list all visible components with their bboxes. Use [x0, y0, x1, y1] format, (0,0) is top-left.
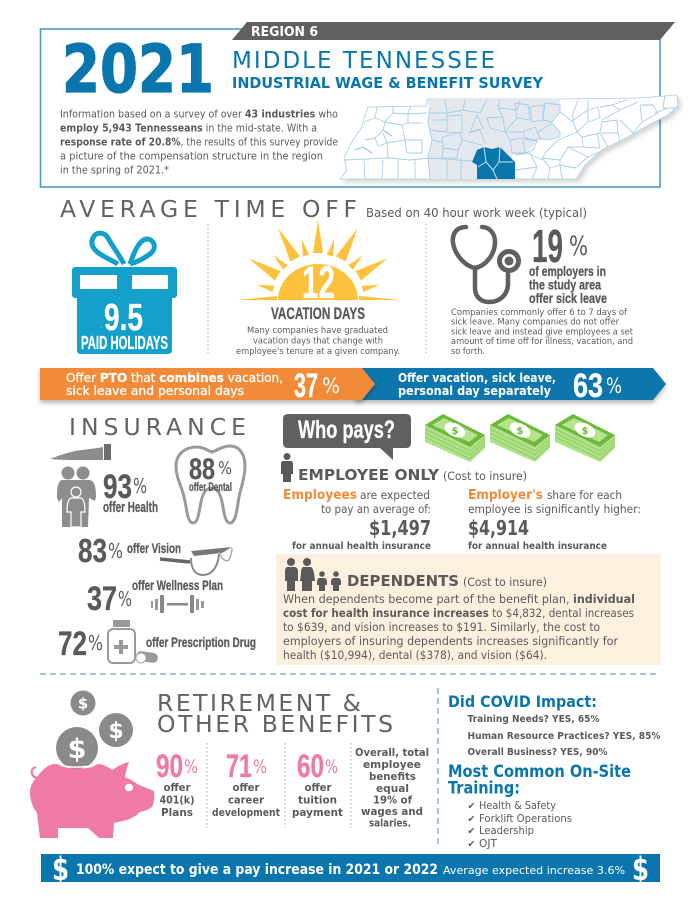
heading: dependents: DEPENDENTS: [347, 572, 459, 590]
panel: on-site training: [448, 762, 631, 850]
stat: 83 percent vision: offer Vision: [127, 540, 181, 556]
text: sick leave description: Companies commonly offer 6 to 7 days of: [451, 308, 628, 318]
text: sick leave description: amount of time off for illness, vacation, and: [451, 337, 633, 347]
list: training topics: ✔: [468, 839, 475, 850]
banner: offer separately (blue arrow): Offer vacation, sick leave,: [398, 370, 556, 385]
stat: 9.5: 9.5: [104, 297, 143, 339]
text: employees cost: $1,497: [369, 516, 431, 540]
heading: retirement and other benefits: OTHER BENEFITS: [157, 710, 393, 738]
list: training topics: ✔: [468, 814, 475, 825]
heading: vacation days: VACATION DAYS: [271, 304, 365, 323]
intro text block: in the spring of 2021.*: [60, 164, 169, 176]
text: vacation description: vacation days that change with: [253, 336, 383, 346]
stat: 37 percent wellness: offer Wellness Plan: [132, 577, 223, 593]
heading: most common on-site training: Training:: [448, 778, 520, 798]
text: employees cost: for annual health insurance: [292, 541, 431, 552]
text: overall benefits share: employee: [363, 759, 421, 771]
banner: offer separately (blue arrow): 63: [573, 367, 603, 405]
list: training topics: OJT: [479, 838, 498, 850]
banner: pay increase: [41, 850, 660, 888]
icon: money stacks: [425, 414, 615, 462]
stat: 72 percent prescription: 72: [58, 625, 87, 663]
icon: piggy bank with coins: [30, 690, 154, 838]
text: dependents description: employers of insuring dependents increases significantly for: [283, 634, 618, 648]
text: pay increase statement: 100% expect to give a pay increase in 2021 or 2022: [76, 862, 438, 878]
stat: 71 percent career development: 71: [226, 748, 252, 784]
text: sick leave description: sick leave. Many companies do not offer: [451, 318, 619, 328]
stat: 37 percent wellness: 37: [87, 580, 117, 618]
icon: dollar sign right: $: [632, 850, 649, 888]
icon and stat: tooth 88 percent dental: offer Dental: [189, 482, 232, 494]
list: training topics: Forklift Operations: [479, 813, 572, 825]
stat: 72 percent prescription: %: [88, 631, 103, 655]
heading: insurance: INSURANCE: [69, 413, 246, 441]
text: overall benefits share: Overall, total: [355, 747, 429, 759]
text: covid results: Overall Business? YES, 90%: [468, 747, 608, 758]
callout: who pays speech bubble: [283, 414, 411, 460]
text: covid results: Human Resource Practices? YES, 85%: [468, 731, 660, 742]
intro text block: [60, 108, 338, 176]
heading: did covid impact: Did COVID Impact:: [448, 692, 597, 711]
banner: offer separately (blue arrow): personal day separately: [398, 383, 551, 398]
icon: money stack 3: $: [582, 426, 588, 437]
text: employer cost: share for each: [547, 488, 622, 502]
text: covid results: Training Needs? YES, 65%: [468, 714, 600, 725]
stat: 90 percent 401k: %: [184, 756, 198, 778]
heading: retirement and other benefits: RETIREMENT &: [157, 689, 361, 717]
heading: employee only: [298, 466, 527, 484]
text: overall benefits share: benefits: [369, 771, 416, 783]
icon: sun with vacation days: [237, 220, 400, 308]
heading: average time off: AVERAGE TIME OFF: [60, 195, 357, 223]
icon: family of four: [285, 558, 341, 591]
stat: 60 percent tuition: payment: [292, 806, 343, 819]
text: overall benefits share: wages and: [361, 806, 423, 818]
icon and stat: tooth 88 percent dental: %: [218, 458, 232, 479]
stat: 71 percent career development: %: [253, 756, 267, 778]
text: employer cost: [468, 487, 641, 552]
stat: 83 percent vision: [78, 532, 181, 569]
list: training topics: ✔: [468, 826, 475, 837]
stat: 60 percent tuition: tuition: [298, 794, 337, 806]
list: training topics: ✔: [468, 801, 475, 812]
text: overall benefits share: salaries.: [369, 818, 411, 830]
icon and stat: tooth 88 percent dental: [176, 446, 245, 523]
heading: most common on-site training: [448, 762, 631, 798]
stat: 83 percent vision: 83: [78, 532, 107, 569]
title: region name: MIDDLE TENNESSEE: [232, 48, 495, 74]
panel: covid impact: [448, 692, 660, 758]
stat: 90 percent 401k: 90: [156, 748, 183, 784]
icon: stethoscope: [453, 227, 518, 302]
panel: dependents: [276, 554, 661, 665]
text: overall benefits share: equal: [376, 783, 409, 795]
stat: 93 percent health: 93: [103, 468, 132, 506]
text: dependents description: [283, 592, 635, 662]
callout: who pays speech bubble: Who pays?: [298, 416, 395, 444]
text: employees cost: to pay an average of:: [321, 502, 431, 516]
stat: 19 percent sick leave: [529, 220, 607, 306]
stat: 71 percent career development: [212, 748, 280, 819]
text: covid results: [468, 714, 660, 758]
text: dependents description: When dependents become part of the benefit plan, individual: [283, 592, 635, 606]
heading: retirement and other benefits: [157, 689, 393, 738]
stat: 60 percent tuition: 60: [297, 748, 324, 784]
list: training topics: [468, 800, 572, 850]
note: work week basis: Based on 40 hour work week (typical): [366, 205, 587, 220]
stat: 12: 12: [302, 257, 335, 308]
stat: 37 percent wellness: [87, 577, 223, 618]
text: dependents description: health ($10,994), dental ($378), and vision ($64).: [283, 648, 547, 662]
text: employer cost: employee is significantly higher:: [468, 502, 641, 516]
title: survey name: INDUSTRIAL WAGE & BENEFIT SURVEY: [232, 74, 544, 92]
banner: offer separately (blue arrow): [355, 367, 666, 405]
icon: gift with paid holidays: [72, 233, 177, 354]
text: overall benefits share: 19% of: [373, 794, 412, 806]
note: cost to insure: (Cost to insure): [463, 575, 547, 589]
list: training topics: Leadership: [479, 825, 534, 837]
region banner: [232, 22, 675, 40]
stat: 93 percent health: [103, 468, 158, 516]
icon: hand over family: [50, 444, 111, 527]
stat: 60 percent tuition: [292, 748, 343, 819]
list: training topics: Health & Safety: [479, 800, 556, 812]
label: paid holidays: PAID HOLIDAYS: [81, 333, 168, 353]
icon: money stack 3: [555, 414, 615, 462]
text: vacation description: [236, 326, 400, 357]
stat: 72 percent prescription: offer Prescription Drug: [146, 634, 256, 650]
icon: money stack 1: [425, 414, 485, 462]
intro text block: a picture of the compensation structure in the region: [60, 150, 323, 162]
text: average increase: Average expected increase 3.6%: [443, 864, 625, 877]
stat: 90 percent 401k: offer: [164, 781, 191, 794]
stat: 19 percent sick leave: the study area: [529, 276, 601, 292]
banner: offer PTO (orange arrow): 37: [294, 367, 318, 405]
stat: 60 percent tuition: offer: [304, 781, 332, 794]
stat: 90 percent 401k: 401(k): [160, 794, 194, 806]
stat: 83 percent vision: %: [108, 539, 123, 563]
text: employer cost: Employer's: [468, 487, 543, 503]
stat: 71 percent career development: offer: [232, 781, 260, 794]
stat: 93 percent health: offer Health: [103, 500, 158, 516]
text: dependents description: to $639, and vision increases to $191. Similarly, the cost to: [283, 620, 600, 634]
text: sick leave description: [451, 308, 633, 357]
stat: 37 percent wellness: %: [118, 587, 132, 611]
text: dependents description: cost for health insurance increases to $4,832, dental increases: [283, 606, 634, 620]
banner: offer PTO (orange arrow): %: [322, 374, 340, 398]
heading: most common on-site training: Most Common On-Site: [448, 762, 631, 782]
text: employer cost: for annual health insurance: [468, 541, 607, 552]
stat: 71 percent career development: career: [228, 794, 265, 806]
heading: employee only: (Cost to insure): [443, 469, 527, 483]
heading: employee only: EMPLOYEE ONLY: [298, 466, 440, 484]
stat: 19 percent sick leave: 19: [532, 220, 563, 272]
banner: offer separately (blue arrow): %: [606, 374, 622, 398]
icon: dollar sign left: $: [52, 850, 69, 888]
banner: offer PTO (orange arrow): Offer PTO that combines vacation,: [66, 370, 283, 385]
text: sick leave description: sick leave and instead give employees a set: [451, 327, 633, 337]
text: employees cost: [283, 487, 431, 552]
stat: 19 percent sick leave: offer sick leave: [529, 290, 607, 306]
text: sick leave description: so forth.: [451, 347, 485, 357]
stat: 60 percent tuition: %: [325, 756, 338, 778]
text: vacation description: employee's tenure at a given company.: [236, 347, 400, 357]
map: Tennessee counties: [340, 95, 678, 179]
text: employees cost: Employees: [283, 487, 357, 503]
text: overall benefits share: [355, 747, 429, 830]
stat: 19 percent sick leave: of employers in: [529, 263, 606, 279]
intro text block: Information based on a survey of over 43 industries who: [60, 108, 338, 120]
icon: piggy bank with coins: $: [108, 719, 124, 744]
stat: 72 percent prescription: [58, 625, 256, 663]
icon: dumbbell: [151, 595, 204, 613]
stat: 71 percent career development: development: [212, 806, 280, 819]
intro text block: response rate of 20.8%, the results of this survey provide: [60, 137, 338, 149]
panel: header: [40, 22, 678, 187]
icon: prescription bottle and pill: [108, 620, 159, 663]
stat: 19 percent sick leave: %: [569, 231, 588, 262]
icon: piggy bank with coins: $: [78, 694, 88, 712]
icon: money stack 1: $: [452, 426, 458, 437]
text: employees cost: are expected: [360, 488, 430, 502]
text: employer cost: $4,914: [468, 516, 529, 540]
banner: offer PTO (orange arrow): [40, 367, 375, 405]
text: vacation description: Many companies have graduated: [247, 326, 388, 336]
icon and stat: tooth 88 percent dental: 88: [189, 453, 215, 486]
icon: money stack 2: [490, 414, 550, 462]
icon: money stack 2: $: [516, 426, 524, 437]
stat: 90 percent 401k: Plans: [161, 806, 193, 819]
icon: person: [281, 453, 293, 482]
icon: piggy bank with coins: $: [68, 734, 86, 765]
icon: glasses: [160, 547, 232, 575]
stat: 90 percent 401k: [156, 748, 198, 819]
title: year: 2021: [62, 31, 214, 108]
region banner: REGION 6: [251, 25, 318, 40]
stat: 93 percent health: %: [133, 474, 147, 498]
banner: offer PTO (orange arrow): sick leave and personal days: [66, 383, 244, 398]
intro text block: employ 5,943 Tennesseans in the mid-state. With a: [60, 123, 317, 135]
